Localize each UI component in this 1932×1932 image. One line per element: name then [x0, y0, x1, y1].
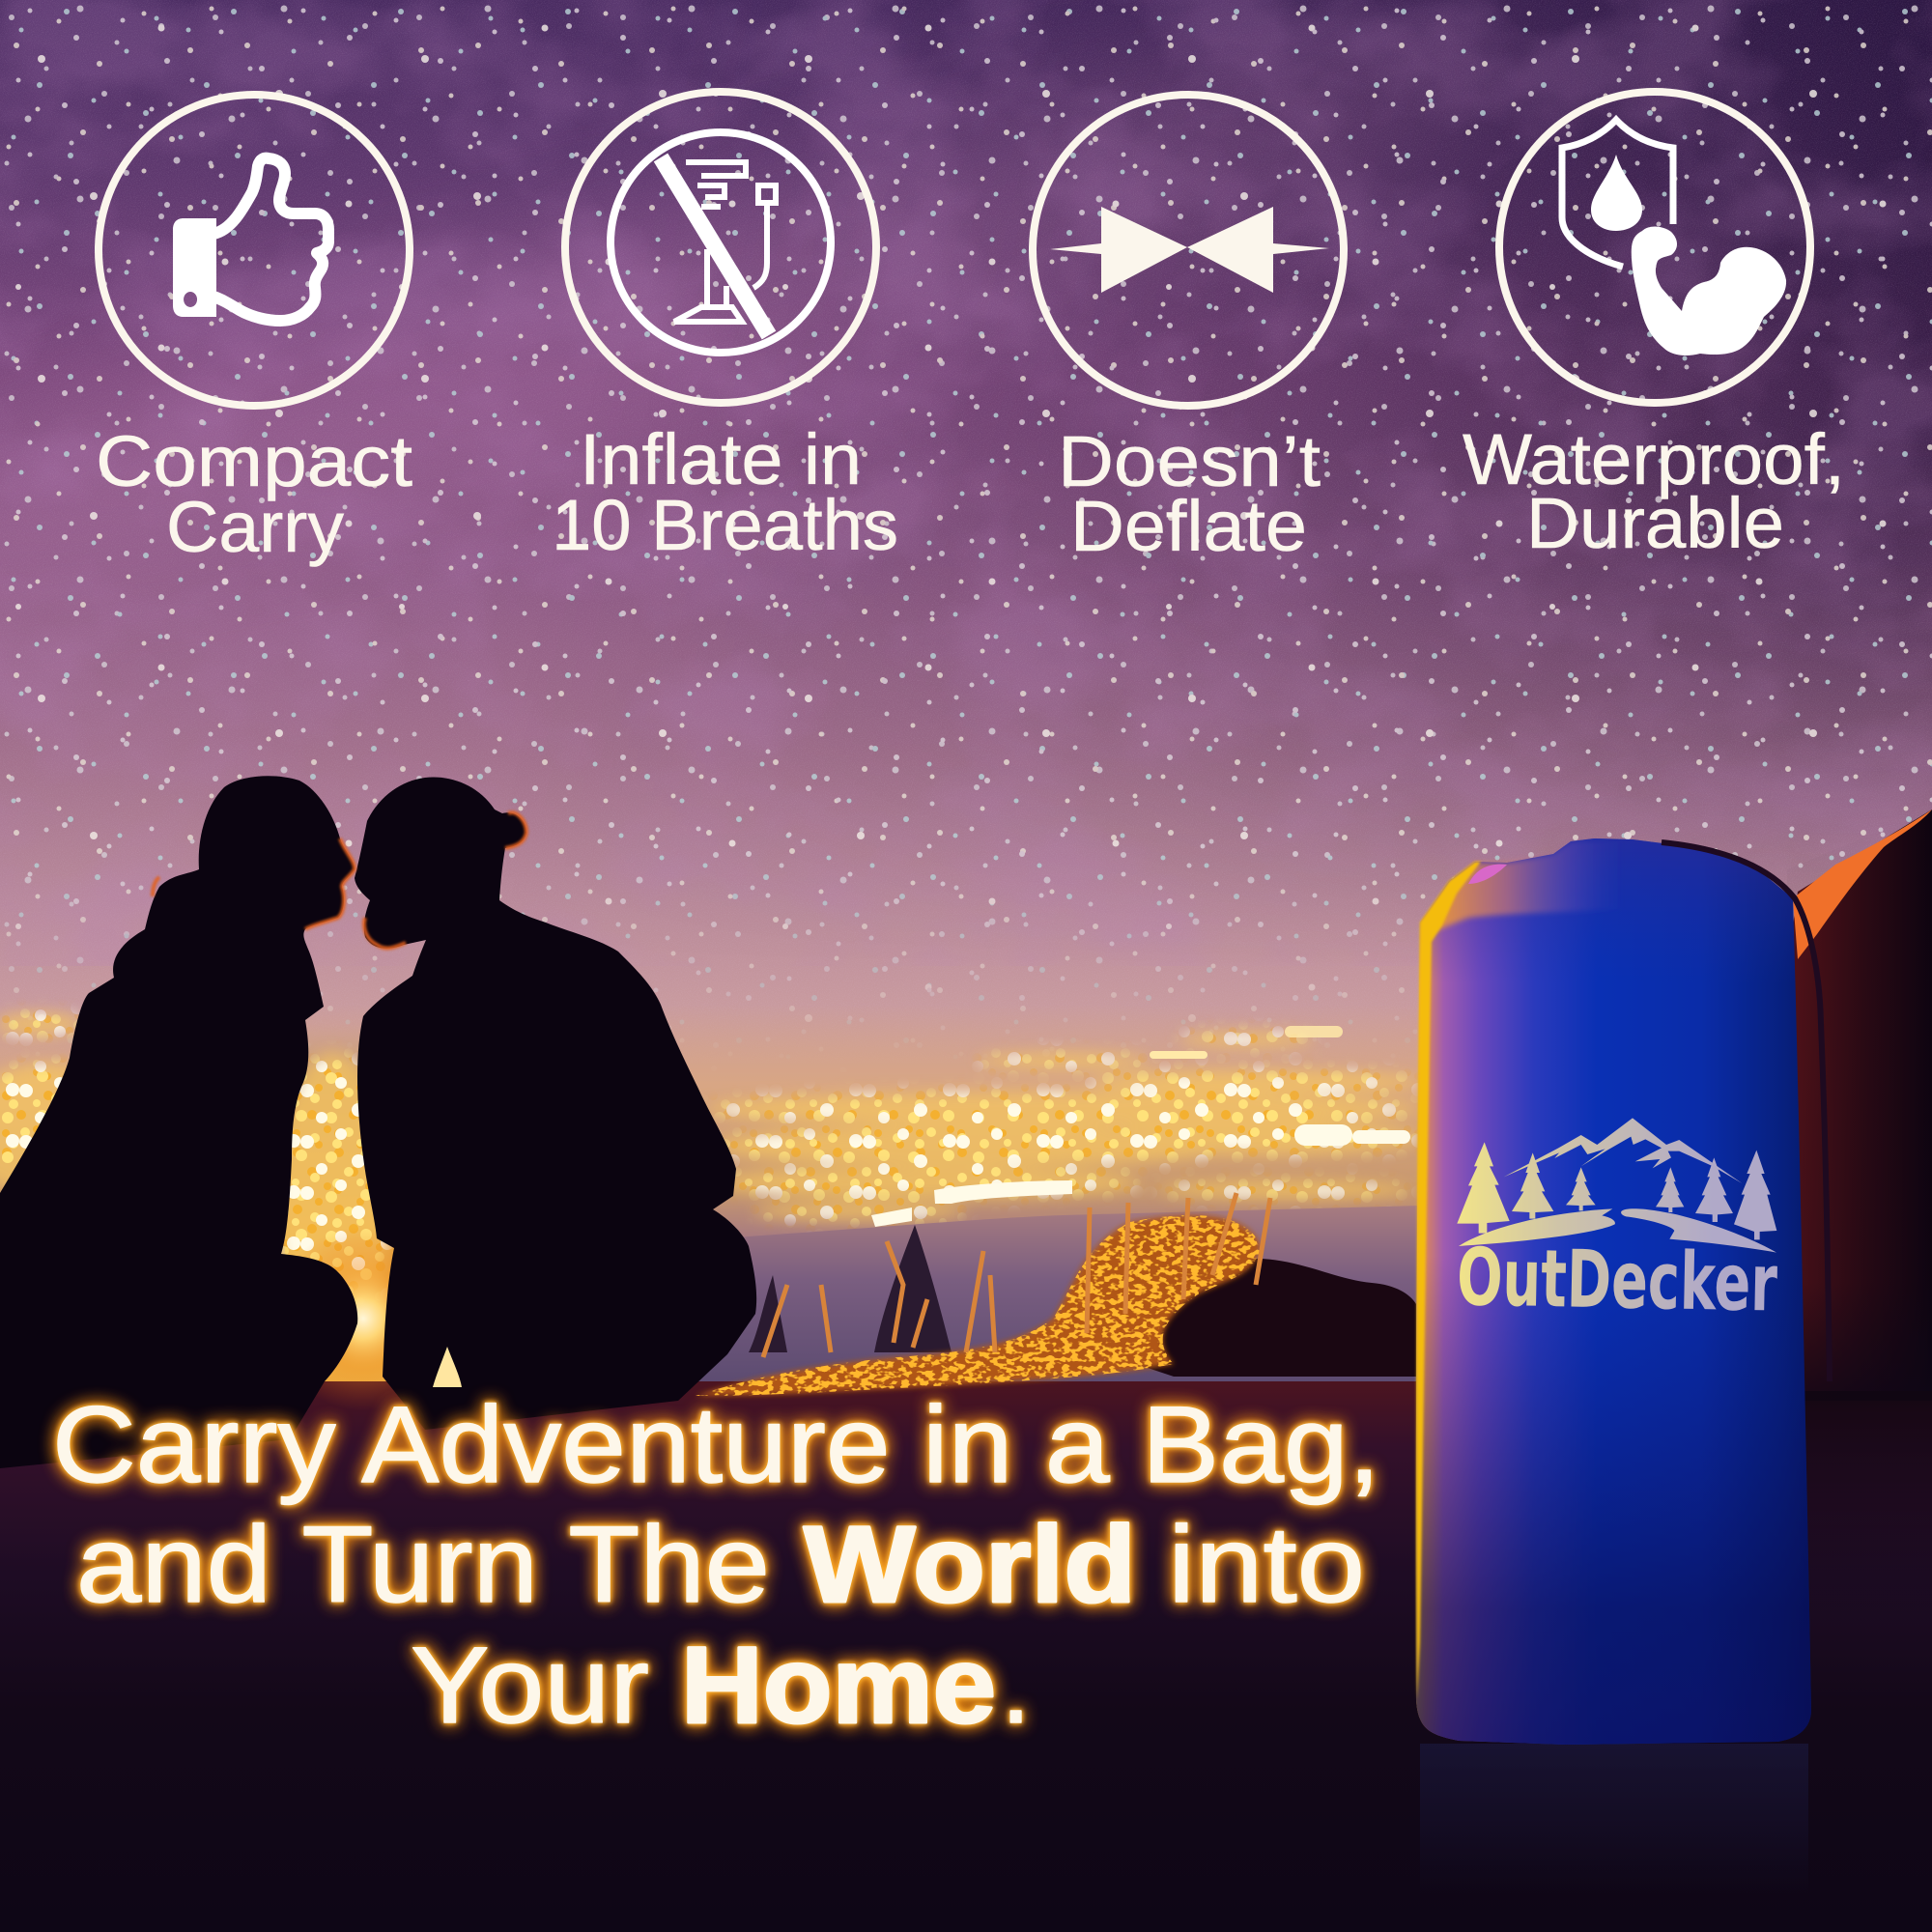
label: Doesn't Deflate: Deflate — [1070, 486, 1307, 566]
logo: mountains — [1504, 1118, 1742, 1183]
headline line 3 — [411, 1625, 1031, 1746]
feature: doesn't deflate — [1033, 95, 1344, 566]
campfire glow — [271, 1227, 494, 1414]
bag drawstring — [1662, 842, 1830, 1381]
logo: pine trees — [1457, 1142, 1776, 1239]
logo: hills — [1459, 1208, 1615, 1246]
headline line 3: . — [1001, 1625, 1031, 1746]
product: blue carry bag — [1416, 838, 1830, 1745]
label: Compact Carry: Compact — [96, 421, 412, 501]
silhouette: woman — [0, 776, 357, 1468]
headline line 3: Home — [681, 1625, 996, 1746]
tent — [1787, 810, 1932, 1401]
headline line 2: into — [1168, 1504, 1365, 1625]
label: Compact Carry — [96, 421, 412, 567]
background: night sky — [0, 0, 1932, 1254]
headline line 1: Carry Adventure in a Bag, — [52, 1384, 1380, 1505]
background: blurred city lights — [0, 1003, 1418, 1381]
feature: inflate in 10 breaths — [552, 92, 898, 565]
rim light on faces and ponytail — [153, 812, 526, 949]
headline line 3: Your — [411, 1625, 649, 1746]
label: Inflate in 10 Breaths: Inflate in — [580, 419, 862, 499]
headline line 2: and Turn The — [76, 1504, 770, 1625]
bush and lit grass — [691, 1193, 1416, 1401]
label: Doesn't Deflate — [1058, 421, 1321, 566]
feature: compact carry — [96, 95, 412, 567]
bag highlight patch — [1468, 865, 1507, 884]
silhouette: man — [355, 777, 756, 1430]
label: Doesn't Deflate: Doesn’t — [1058, 421, 1321, 501]
campfire flame — [433, 1347, 462, 1387]
logo: wordmark: OutDecker — [1456, 1232, 1778, 1330]
silhouette: couple — [0, 776, 756, 1468]
label: Inflate in 10 Breaths: 10 Breaths — [552, 485, 898, 565]
label: Inflate in 10 Breaths — [552, 419, 898, 565]
headline line 2 — [76, 1504, 1365, 1625]
icon: thumbs up — [99, 95, 410, 406]
feature row — [96, 92, 1845, 567]
icon: bowtie valve — [1033, 95, 1344, 406]
background: hazy valley — [676, 1206, 1420, 1391]
label: Compact Carry: Carry — [166, 487, 344, 567]
product: bag reflection — [1420, 1744, 1808, 1893]
dark ground beside bag — [1797, 1391, 1932, 1623]
icon: no pump — [565, 92, 876, 403]
label: Waterproof, Durable: Durable — [1526, 483, 1784, 563]
label: Waterproof, Durable — [1463, 419, 1845, 563]
bag yellow edge — [1416, 862, 1481, 1700]
background: dark ground — [0, 1381, 1932, 1932]
background: stars — [0, 0, 1932, 1072]
headline line 2: World — [804, 1504, 1136, 1625]
logo: OutDecker — [1456, 1118, 1778, 1330]
feature: waterproof, durable — [1463, 92, 1845, 563]
bag top gather — [1432, 841, 1633, 932]
label: Waterproof, Durable: Waterproof, — [1463, 419, 1845, 499]
headline — [52, 1384, 1380, 1746]
icon: shield and arm — [1499, 92, 1810, 403]
